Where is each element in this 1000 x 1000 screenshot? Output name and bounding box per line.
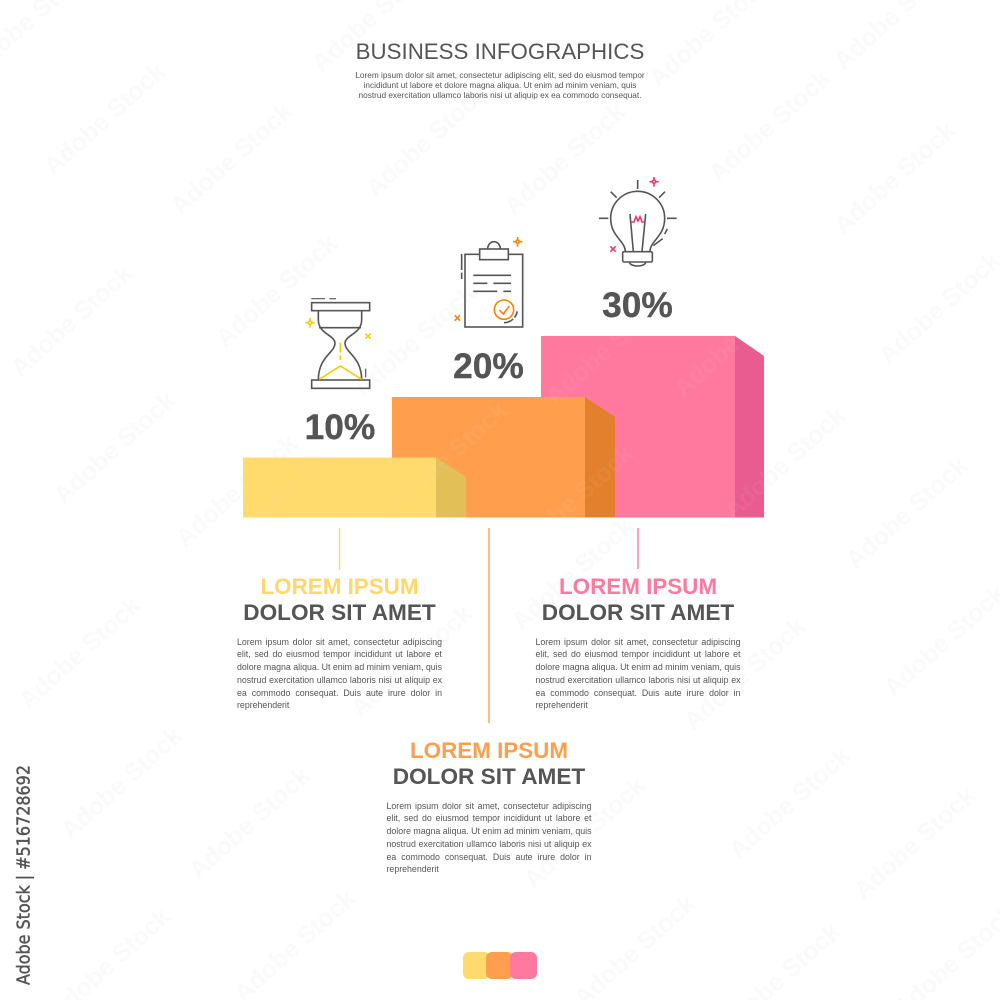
- text block: pink: [536, 574, 740, 710]
- icon: clipboard: [455, 237, 523, 327]
- text block: orange: LOREM IPSUM: [410, 738, 568, 763]
- text block: yellow: ea commodo consequat. Duis aute irure dolor in: [237, 688, 442, 698]
- text block: orange: reprehenderit: [386, 864, 439, 874]
- text: Adobe Stock: [841, 451, 973, 575]
- icon: light bulb: [599, 177, 677, 266]
- text: Adobe Stock: [519, 771, 651, 895]
- text block: orange: dolore magna aliqua. Ut enim ad minim veniam, quis: [386, 826, 592, 836]
- text: Adobe Stock: [541, 287, 673, 411]
- intro text: incididunt ut labore et dolore magna aliqua. Ut enim ad minim veniam, quis: [364, 81, 636, 90]
- text: Adobe Stock: [229, 422, 361, 546]
- text block: pink: reprehenderit: [536, 700, 588, 710]
- intro text: Lorem ipsum dolor sit amet, consectetur adipiscing elit, sed do eiusmod tempor: [355, 71, 645, 80]
- text: Adobe Stock: [14, 591, 146, 715]
- bar: pink 30%: [541, 336, 764, 518]
- connector line: pink: [637, 528, 639, 569]
- text: Adobe Stock: [849, 781, 981, 905]
- text block: yellow: dolore magna aliqua. Ut enim ad minim veniam, quis: [237, 662, 442, 672]
- connector line: yellow: [338, 528, 340, 570]
- text block: pink: Lorem ipsum dolor sit amet, consectetur adipiscing: [536, 636, 740, 646]
- text: Adobe Stock: [704, 64, 836, 188]
- icon: hourglass: [305, 299, 371, 388]
- text block: pink: LOREM IPSUM: [559, 574, 717, 599]
- title: BUSINESS INFOGRAPHICS: [356, 39, 644, 64]
- text block: orange: [386, 738, 592, 874]
- text: Adobe Stock: [171, 429, 303, 553]
- text: Adobe Stock: [361, 79, 493, 203]
- value: 20%: 20%: [453, 347, 524, 386]
- text: Adobe Stock: [679, 612, 811, 736]
- text block: pink: elit, sed do eiusmod tempor incididunt ut labore et: [536, 649, 740, 659]
- connector line: orange: [488, 528, 490, 723]
- colour swatches: [463, 952, 537, 979]
- text: Adobe Stock: [719, 401, 851, 525]
- text: Adobe Stock: [669, 279, 801, 403]
- text block: orange: ea commodo consequat. Duis aute irure dolor in: [386, 852, 592, 862]
- text block: pink: dolore magna aliqua. Ut enim ad minim veniam, quis: [536, 662, 740, 672]
- text: Adobe Stock: [507, 439, 639, 563]
- text block: yellow: elit, sed do eiusmod tempor incididunt ut labore et: [237, 649, 442, 659]
- bar: orange 20%: [392, 397, 615, 518]
- text: Adobe Stock: [6, 259, 138, 383]
- text block: orange: Lorem ipsum dolor sit amet, consectetur adipiscing: [386, 800, 592, 810]
- value: 30%: 30%: [602, 286, 673, 325]
- value: 10%: 10%: [305, 408, 375, 447]
- text block: yellow: [237, 574, 442, 710]
- text block: pink: DOLOR SIT AMET: [542, 600, 734, 625]
- text: Adobe Stock: [499, 97, 631, 221]
- bar: yellow 10%: [243, 458, 466, 518]
- text block: yellow: reprehenderit: [237, 700, 289, 710]
- text: Adobe Stock: [39, 57, 171, 181]
- text block: orange: nostrud exercitation ullamco laboris nisi ut aliquip ex: [386, 839, 592, 849]
- text block: yellow: DOLOR SIT AMET: [243, 600, 436, 625]
- text block: orange: elit, sed do eiusmod tempor incididunt ut labore et: [386, 813, 592, 823]
- intro text: [355, 71, 645, 100]
- text block: yellow: Lorem ipsum dolor sit amet, consectetur adipiscing: [237, 636, 442, 646]
- text block: pink: ea commodo consequat. Duis aute irure dolor in: [536, 688, 740, 698]
- text: Adobe Stock: [719, 401, 851, 525]
- text: Adobe Stock: [507, 512, 639, 636]
- text: Adobe Stock: [346, 599, 478, 723]
- text: Adobe Stock: [211, 229, 343, 353]
- text: Adobe Stock: [184, 761, 316, 885]
- text: Adobe Stock: [49, 386, 181, 510]
- text block: pink: nostrud exercitation ullamco laboris nisi ut aliquip ex: [536, 675, 740, 685]
- text: Adobe Stock: [829, 116, 961, 240]
- text: Adobe Stock: [166, 97, 298, 221]
- text: Adobe Stock: [349, 279, 481, 403]
- stock credit: Adobe Stock | #516728692: [14, 765, 34, 985]
- text block: yellow: LOREM IPSUM: [260, 574, 418, 599]
- text: Adobe Stock: [56, 721, 188, 845]
- text: Adobe Stock: [381, 396, 513, 520]
- text block: yellow: nostrud exercitation ullamco laboris nisi ut aliquip ex: [237, 675, 442, 685]
- intro text: nostrud exercitation ullamco laboris nisi ut aliquip ex ea commodo consequat.: [359, 91, 641, 100]
- text block: orange: DOLOR SIT AMET: [393, 764, 585, 789]
- text: Adobe Stock: [724, 741, 856, 865]
